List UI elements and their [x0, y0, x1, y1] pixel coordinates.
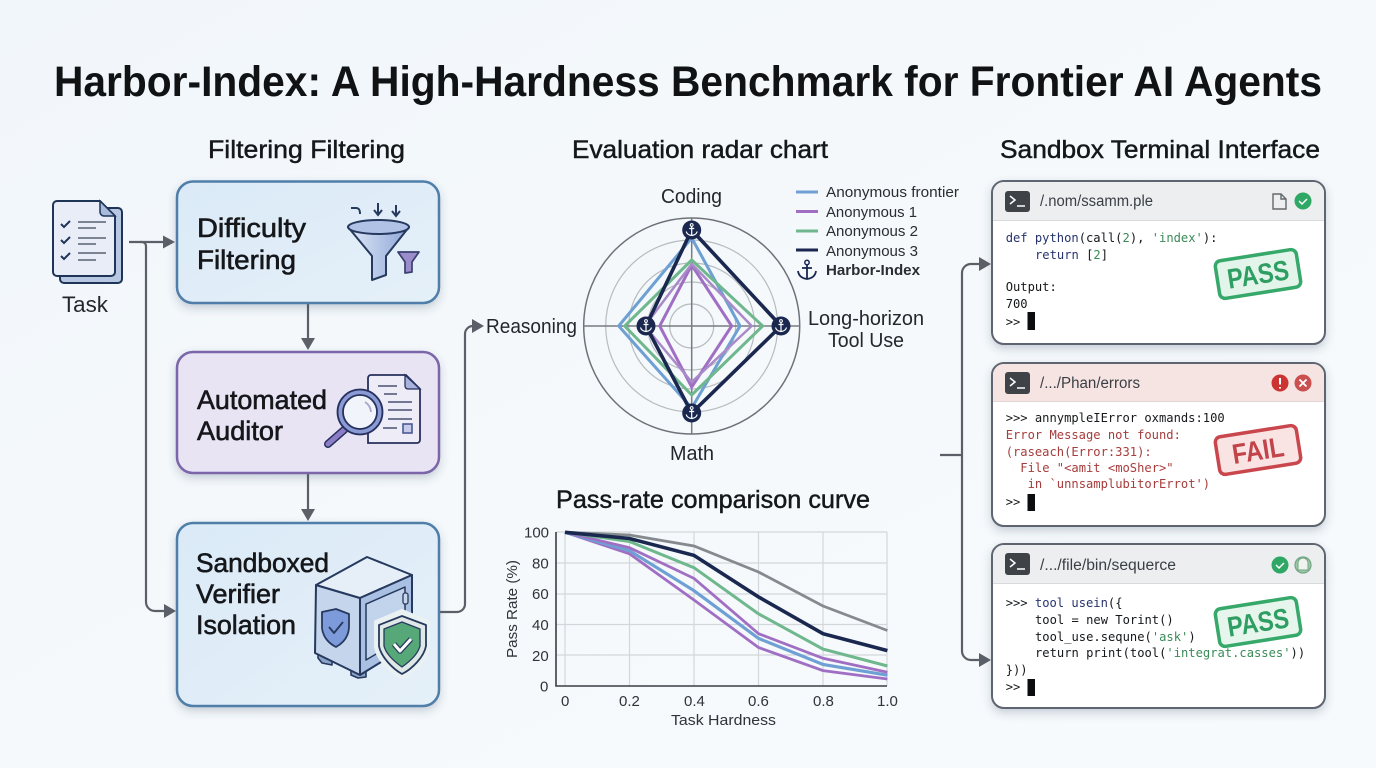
legend: [796, 185, 959, 279]
arrow: task to sandbox: [140, 242, 176, 618]
x ticks: 1.0: [877, 693, 898, 710]
series: blue: [565, 532, 887, 675]
fail stamp: [1215, 425, 1301, 475]
error log: >>: [1006, 495, 1020, 509]
radar axis labels: [486, 186, 924, 465]
series: purple low: [565, 532, 887, 679]
code block: >>: [1006, 315, 1020, 329]
difficulty filtering label: Difficulty: [197, 213, 307, 243]
x ticks: 0: [561, 693, 569, 710]
y axis title: Pass Rate (%): [504, 560, 521, 658]
error log: in `unnsamplubitorErrot'): [1028, 477, 1210, 491]
arrow: charts to terminals: [940, 257, 991, 667]
fail stamp: FAIL: [1230, 431, 1286, 470]
y ticks: [524, 524, 549, 696]
code block: 'ask'): [1152, 630, 1196, 644]
icon: safe with shields: [315, 557, 428, 678]
series: green: [565, 532, 887, 666]
error log: Error Message not found:: [1006, 428, 1181, 442]
sandboxed verifier isolation label: Verifier: [196, 579, 280, 609]
title: Harbor-Index: A High-Hardness Benchmark for Frontier AI Agents: [54, 58, 1322, 106]
radar axis labels: Math: [670, 443, 714, 465]
code block: 700: [1006, 297, 1028, 311]
x ticks: [561, 693, 898, 710]
error log: (raseach(Error:331):: [1006, 445, 1152, 459]
x ticks: 0.2: [619, 693, 640, 710]
pass stamp: PASS: [1225, 254, 1291, 295]
radar marker: tool use: [772, 316, 790, 336]
terminal header: [993, 364, 1324, 402]
code block: tool_use.sequne(: [1035, 630, 1152, 644]
radar marker: coding: [682, 220, 701, 240]
radar axis labels: Long-horizon: [808, 308, 924, 330]
automated auditor label: Auditor: [197, 416, 283, 446]
error log: >>> annympleIError oxmands:100: [1006, 411, 1225, 425]
y ticks: 80: [532, 556, 549, 572]
x ticks: 0.6: [748, 693, 769, 710]
legend: Anonymous 2: [826, 224, 918, 240]
y ticks: 0: [540, 678, 548, 696]
radar marker: reasoning: [636, 316, 656, 336]
panel: terminal fail: [992, 363, 1325, 526]
code block: return: [1035, 248, 1086, 262]
code block: (call(2), 'index'):: [1079, 231, 1217, 245]
radar series: anonymous frontier: [619, 238, 740, 408]
terminal header: /.../file/bin/sequerce: [1040, 557, 1176, 574]
error log: File "<amit <moSher>": [1020, 461, 1174, 475]
sandboxed verifier isolation label: Sandboxed: [196, 548, 329, 578]
series: purple high: [565, 532, 887, 672]
x ticks: 0.4: [684, 693, 705, 710]
code block: return print(tool(: [1035, 646, 1166, 660]
y ticks: 20: [532, 648, 549, 665]
cursor: [1028, 494, 1035, 511]
icon: task document: [53, 201, 122, 283]
pass stamp: PASS: [1225, 602, 1291, 643]
difficulty filtering label: Filtering: [197, 245, 296, 275]
radar axis labels: Tool Use: [828, 330, 904, 352]
panel: difficulty filtering: [177, 182, 439, 303]
radar series: anonymous 2: [625, 260, 763, 395]
arrow: task to filtering: [129, 236, 175, 248]
icon: magnifier and document: [328, 375, 420, 444]
y ticks: 100: [524, 524, 549, 542]
panel: terminal pass 1: [992, 181, 1325, 344]
legend: Harbor-Index: [826, 263, 920, 279]
legend: Anonymous 3: [826, 244, 918, 260]
panel: terminal pass 2: [992, 544, 1325, 708]
cursor: [1028, 312, 1035, 330]
terminal header: [993, 182, 1324, 220]
radar series: harbor-index: [646, 230, 781, 413]
code block: def python: [1006, 231, 1079, 245]
panel: sandboxed verifier isolation: [177, 523, 439, 706]
radar axis labels: Coding: [661, 186, 722, 208]
line chart: [504, 524, 898, 729]
code block: >>>: [1006, 596, 1035, 610]
code block: [2]: [1086, 248, 1108, 262]
radar axis labels: Reasoning: [486, 316, 577, 338]
code block: tool = new Torint(): [1035, 613, 1174, 627]
x ticks: 0.8: [813, 693, 834, 710]
series: navy: [565, 532, 887, 651]
code block: tool usein({: [1035, 596, 1123, 610]
automated auditor label: Automated: [197, 385, 327, 415]
terminal header: /.nom/ssamm.ple: [1040, 193, 1153, 210]
code block: >>: [1006, 680, 1020, 694]
code block: 'integrat.casses')): [1166, 646, 1305, 660]
legend: Anonymous 1: [826, 205, 917, 221]
radar marker: math: [682, 404, 701, 422]
y ticks: 40: [532, 617, 549, 634]
task label: Task: [62, 292, 109, 317]
legend: Anonymous frontier: [826, 185, 959, 201]
chart grid: [556, 532, 887, 686]
heading: pass-rate curve: Pass-rate comparison curve: [556, 486, 870, 514]
heading: sandbox terminal: Sandbox Terminal Interface: [1000, 136, 1320, 164]
arrow: auditor to sandbox: [301, 474, 315, 521]
radar chart: [486, 186, 924, 465]
y ticks: 60: [532, 586, 549, 603]
icon: funnel: [348, 203, 419, 280]
code block: })): [1006, 663, 1028, 677]
radar series: anonymous 1 outer: [645, 264, 752, 382]
radar grid: [584, 218, 800, 434]
terminal header: [993, 545, 1324, 584]
sandboxed verifier isolation label: Isolation: [196, 610, 296, 640]
series: reference gray: [565, 532, 887, 630]
cursor: [1028, 679, 1035, 696]
arrow: sandbox to reasoning: [440, 319, 484, 612]
terminal header: /.../Phan/errors: [1040, 375, 1140, 392]
x axis title: Task Hardness: [671, 712, 776, 729]
heading: filtering: Filtering Filtering: [208, 136, 405, 164]
panel: automated auditor: [177, 352, 439, 473]
arrow: filtering to auditor: [301, 303, 315, 350]
radar series: anonymous 1: [660, 265, 732, 387]
code block: Output:: [1006, 280, 1057, 294]
heading: radar chart: Evaluation radar chart: [572, 136, 828, 164]
